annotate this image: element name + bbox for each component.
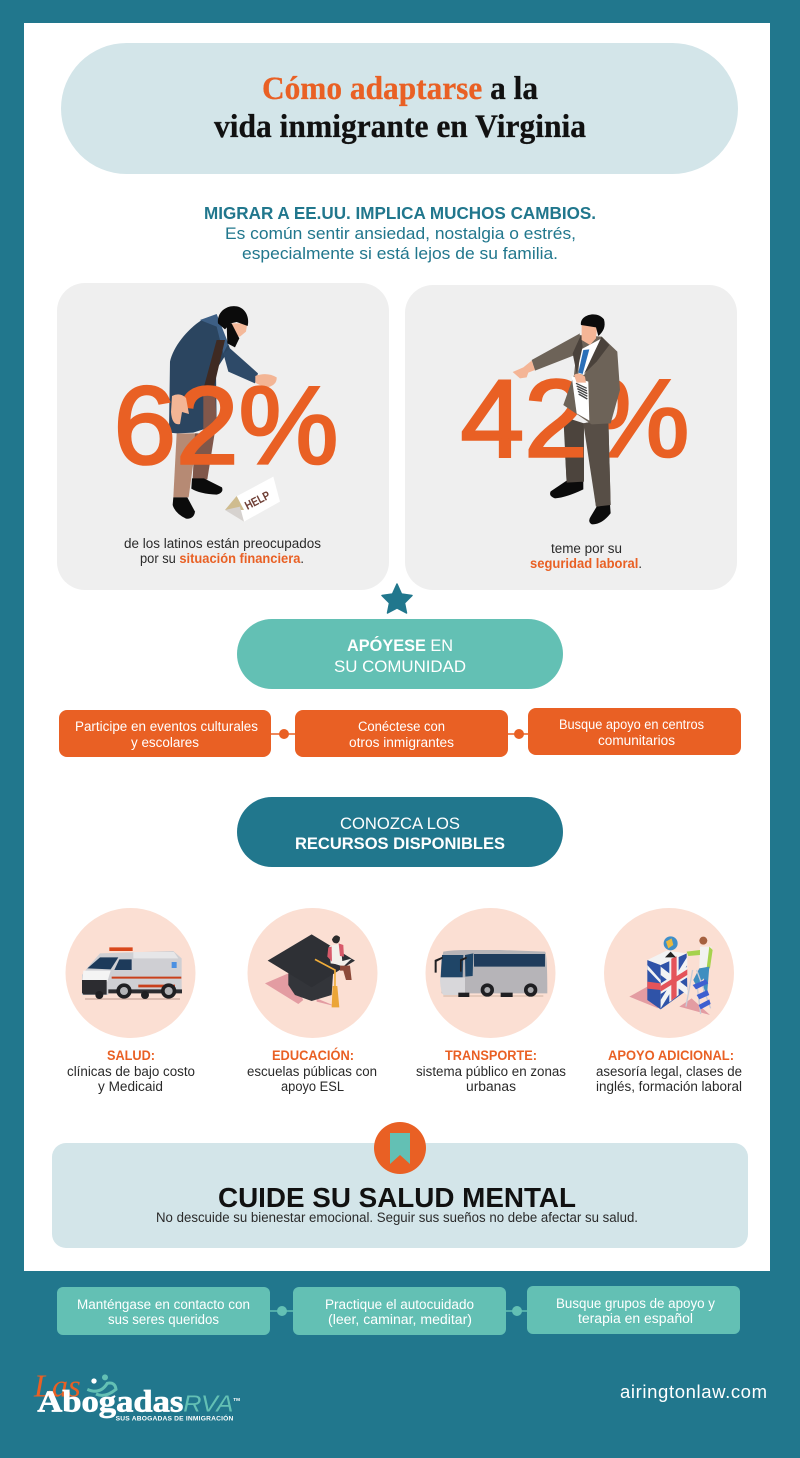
label: education: EDUCACIÓN: (272, 1048, 354, 1063)
panel: 42 percent job security (405, 285, 737, 590)
label: education: apoyo ESL (281, 1079, 344, 1094)
box: support groups: Busque grupos de apoyo y (556, 1296, 715, 1311)
icon: bookmark badge (374, 1122, 426, 1174)
resource: additional support (596, 908, 742, 1094)
label: additional support (596, 1048, 742, 1094)
community connectors (271, 730, 528, 738)
icon: bus (426, 908, 556, 1038)
intro text: MIGRAR A EE.UU. IMPLICA MUCHOS CAMBIOS. (204, 203, 596, 223)
big number 62%: 62% (114, 364, 338, 488)
illustration: man legs (550, 417, 611, 524)
caption 42 (530, 541, 642, 571)
website: airingtonlaw.com (620, 1381, 767, 1402)
box: keep in touch (57, 1287, 270, 1335)
box: cultural events: y escolares (131, 735, 199, 750)
logo: Las (33, 1368, 81, 1404)
label: additional support: APOYO ADICIONAL: (608, 1048, 734, 1063)
icon: graduation cap (248, 908, 378, 1038)
caption 42: seguridad laboral. (530, 556, 642, 571)
box: support groups: terapia en español (578, 1311, 693, 1326)
heading pill: resources: CONOZCA LOS (340, 814, 460, 833)
box: connect with immigrants: Conéctese con (358, 719, 445, 734)
caption 62 (124, 536, 321, 566)
label: health: clínicas de bajo costo (67, 1064, 195, 1079)
box: community centres (528, 708, 741, 755)
label: education: escuelas públicas con (247, 1064, 377, 1079)
heading pill: community: SU COMUNIDAD (334, 657, 466, 676)
mental health connectors (270, 1306, 527, 1316)
box: community centres: Busque apoyo en centros (559, 717, 704, 732)
resource: health (66, 908, 196, 1094)
box: connect with immigrants: otros inmigrantes (349, 735, 454, 750)
box: self care: (leer, caminar, meditar) (328, 1312, 472, 1327)
title banner (61, 43, 738, 174)
label: transport: sistema público en zonas (416, 1064, 566, 1079)
box: cultural events (59, 710, 271, 757)
label: additional support: inglés, formación laboral (596, 1079, 742, 1094)
title banner: vida inmigrante en Virginia (214, 109, 586, 145)
label: additional support: asesoría legal, clases de (596, 1064, 742, 1079)
heading pill: resources: RECURSOS DISPONIBLES (295, 834, 505, 853)
logo (33, 1368, 240, 1422)
intro text: Es común sentir ansiedad, nostalgia o estrés, (225, 224, 576, 243)
heading pill: community (237, 619, 563, 689)
big number 42%: 42% (460, 358, 690, 480)
logo: RVA (183, 1391, 233, 1417)
resource: education (247, 908, 378, 1094)
white content panel (24, 23, 770, 1271)
intro text: especialmente si está lejos de su familia. (242, 244, 558, 263)
heading pill: community: APÓYESE EN (347, 636, 453, 655)
box: support groups (527, 1286, 740, 1334)
box: cultural events: Participe en eventos culturales (75, 719, 258, 734)
icon: english book, globe and ladder (604, 908, 734, 1038)
icon: star (382, 584, 412, 613)
title banner: Cómo adaptarse a la (262, 71, 538, 107)
resource: transport (416, 908, 566, 1094)
illustration: worried man with help sign (169, 306, 280, 522)
logo: Abogadas (37, 1385, 183, 1419)
intro text (204, 203, 596, 263)
logo: TM (233, 1397, 240, 1402)
box: keep in touch: sus seres queridos (108, 1312, 219, 1327)
box: self care: Practique el autocuidado (325, 1297, 474, 1312)
illustration: man's hand over number (171, 394, 189, 424)
box: self care (293, 1287, 506, 1335)
label: health: SALUD: (107, 1048, 155, 1063)
caption 62: de los latinos están preocupados (124, 536, 321, 551)
box: community centres: comunitarios (598, 733, 675, 748)
heading pill: resources (237, 797, 563, 867)
logo: SUS ABOGADAS DE INMIGRACIÓN (116, 1413, 233, 1422)
label: health (67, 1048, 195, 1094)
label: education (247, 1048, 377, 1094)
label: transport (416, 1048, 566, 1094)
label: health: y Medicaid (98, 1079, 163, 1094)
illustration: man jacket and paper (513, 314, 620, 507)
text: mental health note: No descuide su bienestar emocional. Seguir sus sueños no debe afectar su salud. (156, 1210, 638, 1225)
heading: mental health: CUIDE SU SALUD MENTAL (218, 1182, 576, 1213)
icon: logo people (87, 1374, 116, 1395)
panel: mental health (52, 1122, 748, 1248)
label: transport: urbanas (466, 1079, 516, 1094)
box: keep in touch: Manténgase en contacto con (77, 1297, 250, 1312)
illustration: worried man with help sign: HELP (242, 488, 272, 513)
label: transport: TRANSPORTE: (445, 1048, 537, 1063)
panel: 62 percent financial worry (57, 283, 389, 590)
box: connect with immigrants (295, 710, 508, 757)
icon: ambulance (66, 908, 196, 1038)
caption 42: teme por su (551, 541, 622, 556)
caption 62: por su situación financiera. (140, 551, 304, 566)
